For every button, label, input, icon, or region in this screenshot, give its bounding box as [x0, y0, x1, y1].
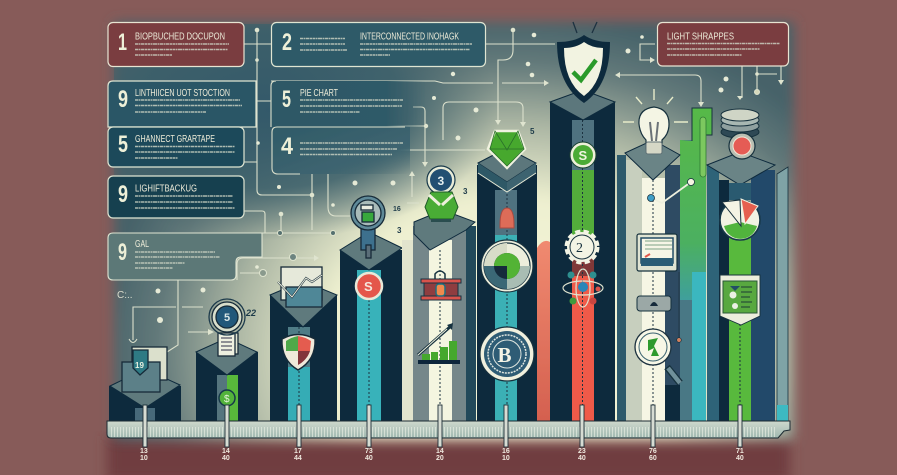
icon: light bulb [623, 89, 688, 154]
ruler pins and labels: 20 [436, 455, 444, 462]
panel: interconnected: INTERCONNECTED INOHAGK [360, 30, 459, 42]
icon: coin 3 [427, 166, 455, 194]
icon: green dollar coin: S [578, 148, 588, 163]
icon: green dollar: $ [224, 394, 230, 405]
bar: red accent strip [537, 241, 550, 422]
panel: lightning section: 9 [118, 86, 128, 113]
ruler pins and labels: 40 [365, 455, 373, 462]
ruler pins and labels: 10 [140, 455, 148, 462]
ruler pins and labels: 16 [502, 448, 510, 455]
timeline ruler [107, 421, 790, 438]
pointer line with dot [677, 272, 681, 342]
ruler pins and labels: 60 [649, 455, 657, 462]
panel: light shapes: LIGHT SHRAPPES [667, 30, 734, 42]
ruler pins and labels: 40 [736, 455, 744, 462]
panel: light shapes [658, 22, 788, 66]
icon: checklist card [720, 275, 760, 325]
annotation numbers: 3 [397, 226, 402, 235]
sparkles [156, 33, 728, 323]
icon: bank lock [421, 271, 461, 300]
bar 4 [340, 196, 403, 422]
panel: goal: 9 [118, 239, 127, 266]
ruler pins and labels: 13 [140, 448, 148, 455]
icon: green gem [425, 192, 458, 222]
icon: line chart document [278, 267, 322, 307]
icon: atom [563, 269, 603, 307]
icon: red dollar: S [364, 279, 373, 294]
panel: goal [108, 233, 262, 280]
icon: gear: 2 [576, 241, 583, 256]
panel: pie chart: 5 [282, 86, 291, 113]
panel: interconnected: 2 [282, 29, 292, 56]
panel: channel graphic: 5 [118, 131, 128, 158]
ruler pins and labels: 40 [222, 455, 230, 462]
annotation numbers: 22 [245, 308, 256, 318]
bar: green stepped column [680, 108, 712, 422]
bar 9 [707, 109, 788, 422]
icon: document folder: 19 [135, 361, 144, 370]
icon: coin B [480, 327, 534, 381]
icon: document card [637, 234, 677, 271]
annotation numbers: 3 [463, 187, 468, 196]
panel: distributed document: BIOPBUCHED DOCUPON [135, 30, 225, 42]
panel: channel graphic: GHANNECT GRARTAPE [135, 133, 215, 145]
icon: gear [567, 232, 597, 262]
panel: lightbacking [108, 176, 244, 218]
ruler pins and labels: 71 [736, 448, 744, 455]
icon: coin 3: 3 [438, 174, 444, 188]
icon: coin stack [721, 109, 759, 138]
icon: emerald [488, 131, 525, 168]
icon: pie chart [720, 199, 760, 240]
ruler pins and labels: 40 [578, 455, 586, 462]
bar 7 [550, 22, 615, 422]
ruler pins and labels [140, 405, 744, 462]
panel: pie chart [271, 81, 425, 127]
panel: pie chart: PIE CHART [300, 87, 338, 99]
panel: lightbacking: LIGHIFTBACKUG [135, 182, 197, 194]
ruler pins and labels: 73 [365, 448, 373, 455]
panel: distributed document: 1 [118, 29, 127, 56]
annotation numbers: 5 [530, 127, 535, 136]
panel: interconnected [272, 22, 486, 66]
ruler pins and labels: 14 [222, 448, 230, 455]
icon: magnifier [635, 329, 680, 383]
bar 5 [402, 166, 476, 422]
icon: shield with check [557, 22, 610, 103]
icon: green dollar coin [570, 142, 596, 168]
icon: magnifier coin [351, 196, 385, 258]
icon: line chart [648, 178, 694, 203]
icon: target [481, 240, 533, 292]
ruler pins and labels: 17 [294, 448, 302, 455]
icon: switch [637, 296, 671, 311]
ruler pins and labels: 10 [502, 455, 510, 462]
panel: lightbacking: 9 [118, 181, 128, 208]
bar 6 [477, 131, 537, 422]
ruler pins and labels: 44 [294, 455, 302, 462]
bar 8 [617, 89, 694, 422]
panel: channel graphic [108, 127, 244, 167]
icon: coin and document: 5 [224, 312, 230, 324]
icon: coin B: B [498, 343, 512, 367]
panel: step 4: 4 [281, 133, 294, 160]
ruler pins and labels: 23 [578, 448, 586, 455]
ruler pins and labels: 14 [436, 448, 444, 455]
panel: lightning section [108, 81, 256, 127]
icon: red dollar [356, 273, 382, 299]
icon: growth chart [418, 323, 460, 364]
legend fragment: C:.. [117, 290, 133, 301]
bar 3 [270, 267, 337, 422]
panel: step 4 [272, 127, 410, 174]
bar 2 [196, 299, 258, 422]
annotation numbers [245, 127, 535, 318]
bar 1 [109, 347, 181, 422]
panel: distributed document [108, 22, 244, 66]
panel: goal: GAL [135, 238, 149, 250]
panel: lightning section: LINTHIICEN UOT STOCTION [135, 87, 230, 99]
connector lines and arrows [133, 30, 787, 352]
icon: red knob [729, 133, 755, 159]
arrowheads and junction dots [129, 28, 784, 342]
ruler pins and labels: 76 [649, 448, 657, 455]
icon: tricolour shield [282, 334, 315, 370]
icon: red tag [500, 208, 514, 228]
annotation numbers: 16 [393, 206, 401, 213]
